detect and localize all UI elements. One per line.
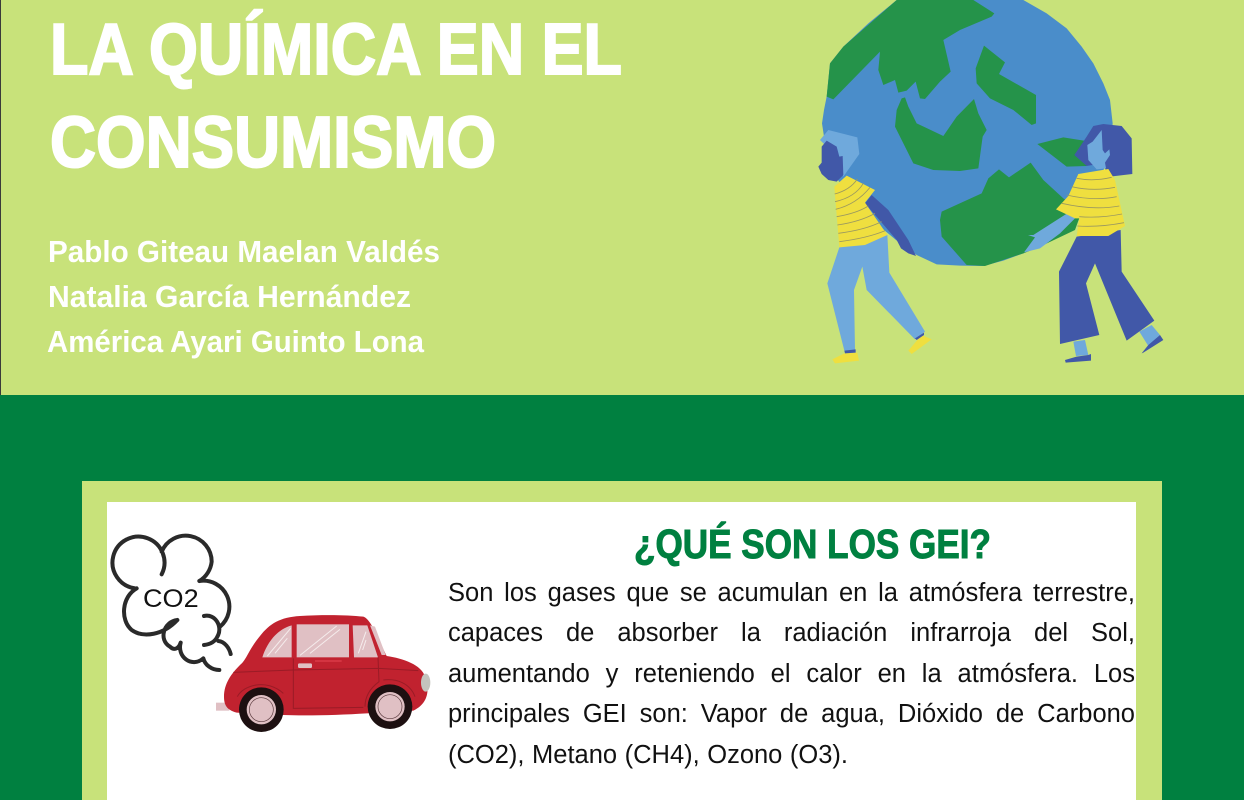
title: CONSUMISMO [50,103,496,183]
authors: Natalia García Hernández [48,279,411,314]
text block: GEI definition [448,579,1135,769]
illustration: people carrying the globe [818,0,1163,363]
text block: GEI definition: (CO2), Metano (CH4), Ozono (O3). [448,741,848,769]
title: LA QUÍMICA EN EL [50,10,622,90]
text block: GEI definition: Son los gases que se acumulan en la atmósfera terrestre, [448,579,1135,607]
title [50,10,622,183]
heading: ¿Qué son los GEI?: ¿QUÉ SON LOS GEI? [634,521,991,567]
globe [822,0,1113,266]
authors: Pablo Giteau Maelan Valdés [48,234,440,269]
icon: CO2 smoke cloud [112,535,231,670]
text block: GEI definition: principales GEI son: Vapor de agua, Dióxido de Carbono [448,700,1135,728]
icon: red car [216,615,430,732]
text block: GEI definition: aumentando y reteniendo el calor en la atmósfera. Los [448,660,1135,688]
person: right [1024,124,1163,363]
person: left [818,130,932,363]
icon: CO2 smoke cloud: CO2 [143,585,199,613]
authors: América Ayari Guinto Lona [47,324,425,359]
authors [47,234,440,359]
text block: GEI definition: capaces de absorber la radiación infrarroja del Sol, [448,619,1135,647]
